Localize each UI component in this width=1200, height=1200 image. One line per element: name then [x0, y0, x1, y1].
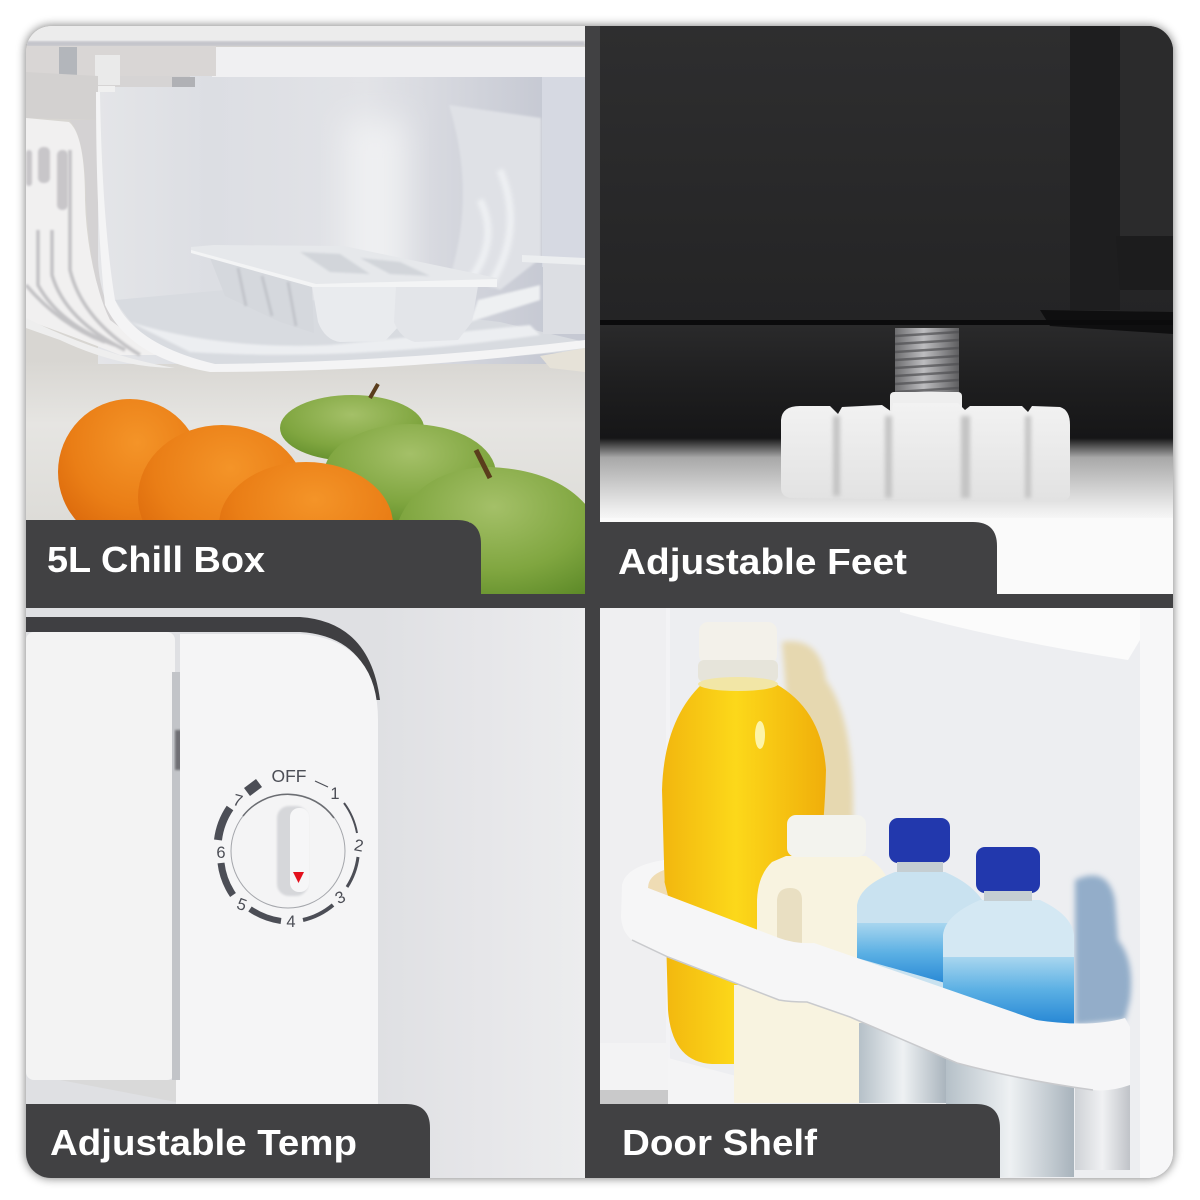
dial numbers: 5 [234, 895, 249, 915]
dark underside and floor [600, 322, 1173, 520]
panel: Adjustable Temp [26, 608, 585, 1178]
panel: Adjustable Feet [600, 26, 1173, 596]
label: 5L Chill Box [26, 520, 481, 594]
freezer door flap [26, 72, 585, 372]
label: 5L Chill Box: 5L Chill Box [47, 539, 265, 580]
dial disc [231, 794, 345, 908]
water bottle back [857, 818, 985, 1103]
oranges and apples [58, 384, 590, 600]
freezer back wall [98, 74, 585, 364]
black fridge body [600, 26, 1173, 322]
label: Adjustable Feet: Adjustable Feet [618, 541, 907, 582]
dial numbers: 4 [286, 913, 296, 931]
shelf bin right [543, 262, 585, 334]
red pointer [293, 872, 304, 883]
panel: 5L Chill Box [26, 26, 590, 600]
dial numbers: 7 [231, 791, 245, 811]
orange middle [138, 425, 296, 520]
dial numbers: 3 [332, 888, 348, 908]
door interior background [666, 608, 1173, 1178]
fridge interior background [26, 26, 585, 522]
dial numbers: 6 [216, 844, 226, 862]
gutters [585, 26, 600, 1178]
fridge wall background [26, 608, 585, 1178]
left door panel [26, 632, 175, 1080]
threaded bolt [895, 328, 959, 392]
orange left [58, 399, 190, 520]
apple back [280, 395, 424, 461]
label: Adjustable Temp: Adjustable Temp [50, 1122, 357, 1163]
label: Adjustable Feet [600, 522, 997, 594]
reflective lower door area [1075, 1085, 1130, 1170]
knob handle [277, 806, 308, 896]
apple middle [324, 424, 496, 524]
apple front [398, 467, 590, 600]
dial numbers [216, 766, 365, 931]
freezer side ridge wall [449, 105, 541, 290]
orange juice bottle [662, 622, 826, 1064]
panel: Door Shelf [600, 608, 1173, 1178]
orange front [220, 462, 393, 520]
front lip [96, 92, 585, 372]
milk jug [734, 815, 888, 1103]
dial scale arcs [218, 781, 358, 921]
dial numbers: 1 [330, 785, 340, 803]
control housing [176, 634, 378, 1104]
dial numbers: OFF [272, 766, 306, 786]
dial numbers: 2 [353, 836, 365, 856]
door shelf rail [621, 860, 1130, 1090]
dark gasket top [26, 617, 380, 700]
shelf inner lip [648, 868, 668, 896]
drip tray floor [116, 297, 581, 361]
temperature dial [216, 766, 365, 931]
white foot knob [781, 392, 1070, 501]
hinge and top flap [212, 47, 585, 77]
water bottle front [943, 847, 1074, 1177]
label: Door Shelf: Door Shelf [622, 1122, 818, 1163]
label: Adjustable Temp [26, 1104, 430, 1178]
lower shelf tray [668, 1090, 760, 1104]
ice cube tray [191, 245, 497, 342]
label: Door Shelf [586, 1104, 1000, 1178]
bottle shadow on wall [780, 638, 856, 815]
